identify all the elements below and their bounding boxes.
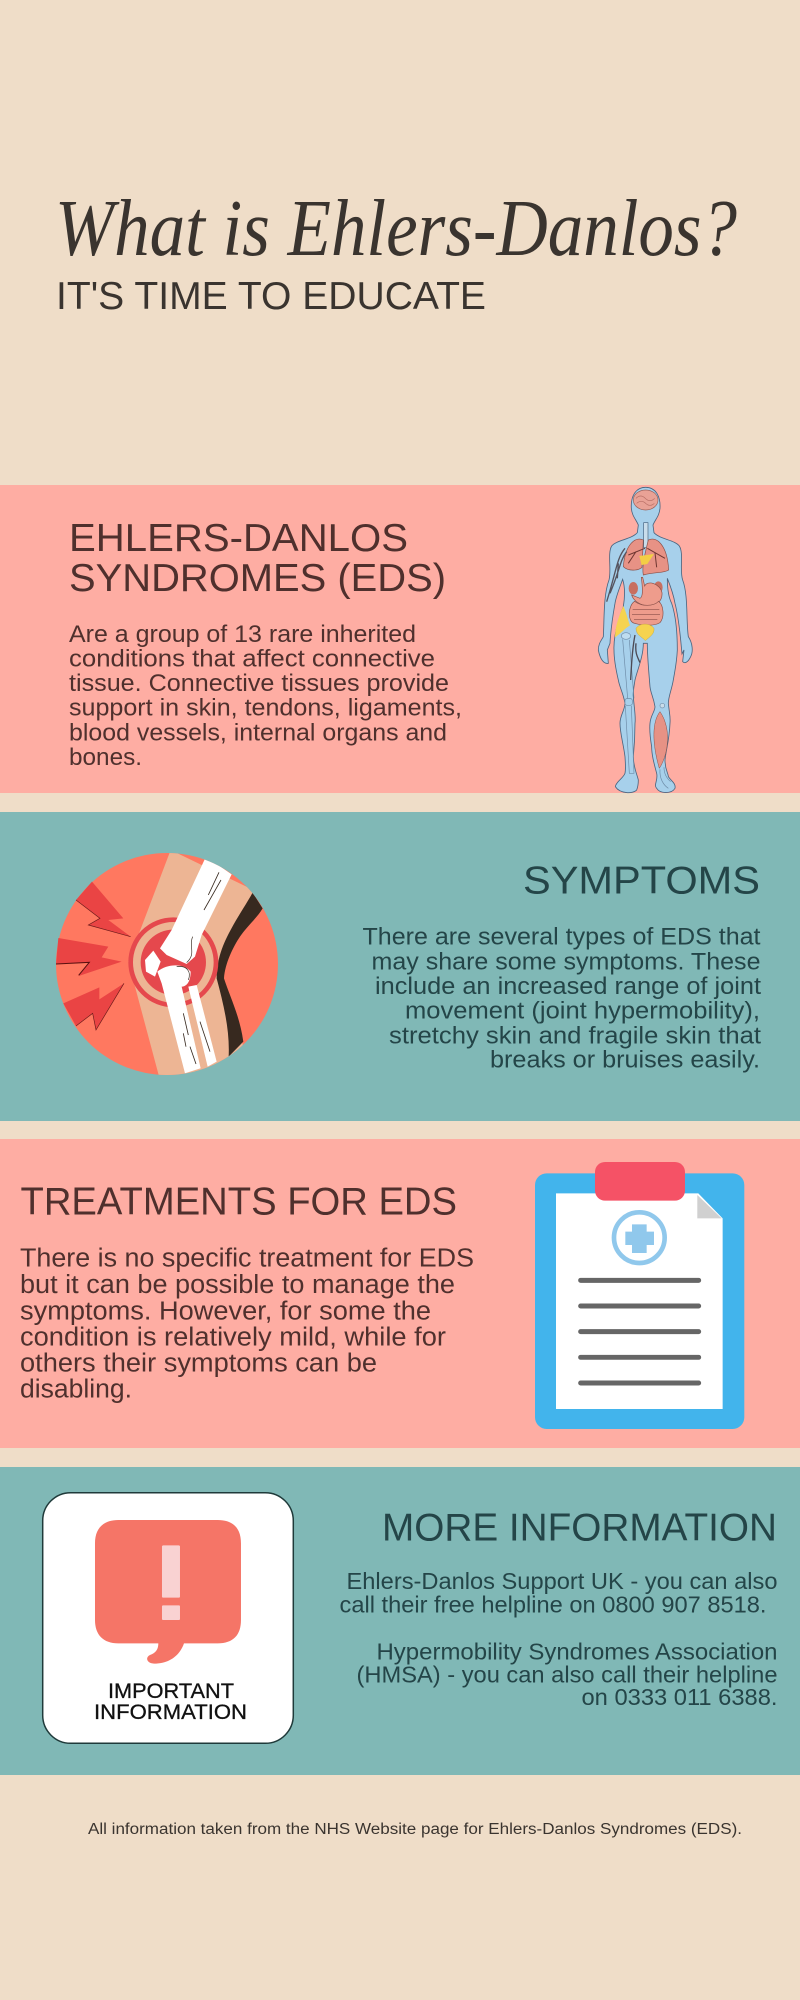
body text: treatments: disabling. [20, 1376, 132, 1404]
body text: contacts: Hypermobility Syndromes Association [376, 1638, 778, 1664]
body text: symptoms: may share some symptoms. These [372, 948, 760, 975]
body text: contacts: on 0333 011 6388. [582, 1684, 778, 1710]
icon: human body anatomy [598, 487, 692, 793]
body text: contacts: Ehlers-Danlos Support UK - you can also [346, 1568, 778, 1594]
icon: speech bubble with exclamation mark [95, 1520, 241, 1664]
panel: symptoms [0, 812, 800, 1121]
body text: definition: tissue. Connective tissues provide [69, 670, 449, 697]
body text: definition: support in skin, tendons, ligaments, [69, 694, 462, 722]
body text: treatments: condition is relatively mild, while for [20, 1324, 447, 1352]
body text: symptoms: There are several types of EDS that [362, 923, 761, 950]
body text: treatments: symptoms. However, for some the [20, 1298, 431, 1326]
body text: treatments: but it can be possible to manage the [20, 1271, 455, 1299]
label: important information [94, 1680, 247, 1724]
body text: definition: Are a group of 13 rare inherited [69, 621, 416, 648]
icon card: important information [43, 1493, 293, 1743]
icon: medical clipboard [535, 1162, 744, 1429]
body text: symptoms: breaks or bruises easily. [490, 1047, 760, 1074]
body text: definition: conditions that affect connective [69, 646, 435, 672]
icon: painful knee joint [56, 850, 278, 1080]
heading: Ehlers-Danlos Syndromes [69, 517, 446, 600]
header [55, 185, 737, 318]
body text: treatments [20, 1245, 474, 1404]
body text: treatments: others their symptoms can be [20, 1350, 377, 1378]
label: important information: INFORMATION [94, 1701, 247, 1724]
footer source note: All information taken from the NHS Website page for Ehlers-Danlos Syndromes (EDS). [88, 1821, 742, 1838]
body text: contacts [340, 1568, 778, 1710]
heading: symptoms: SYMPTOMS [523, 860, 760, 902]
subtitle: IT'S TIME TO EDUCATE [56, 275, 486, 318]
body text: definition: blood vessels, internal organs and [69, 720, 447, 746]
body text: definition: bones. [69, 744, 142, 771]
panel: more information [0, 1467, 800, 1775]
body text: symptoms: stretchy skin and fragile skin that [389, 1022, 761, 1049]
label: important information: IMPORTANT [108, 1680, 234, 1703]
body text: symptoms: include an increased range of joint [375, 973, 761, 1000]
heading: more information: MORE INFORMATION [382, 1507, 777, 1550]
heading: treatments for EDS: TREATMENTS FOR EDS [20, 1180, 457, 1223]
panel: treatments [0, 1139, 800, 1448]
body text: symptoms: movement (joint hypermobility), [405, 998, 760, 1024]
panel: what is EDS [0, 485, 800, 793]
body text: symptoms [362, 923, 761, 1074]
body text: definition [69, 621, 462, 771]
body text: treatments: There is no specific treatment for EDS [20, 1245, 474, 1273]
heading: Ehlers-Danlos Syndromes: EHLERS-DANLOS [69, 517, 408, 560]
body text: contacts: call their free helpline on 0800 907 8518. [340, 1592, 766, 1618]
body text: contacts: (HMSA) - you can also call their helpline [356, 1662, 778, 1688]
heading: Ehlers-Danlos Syndromes: SYNDROMES (EDS) [69, 557, 446, 600]
